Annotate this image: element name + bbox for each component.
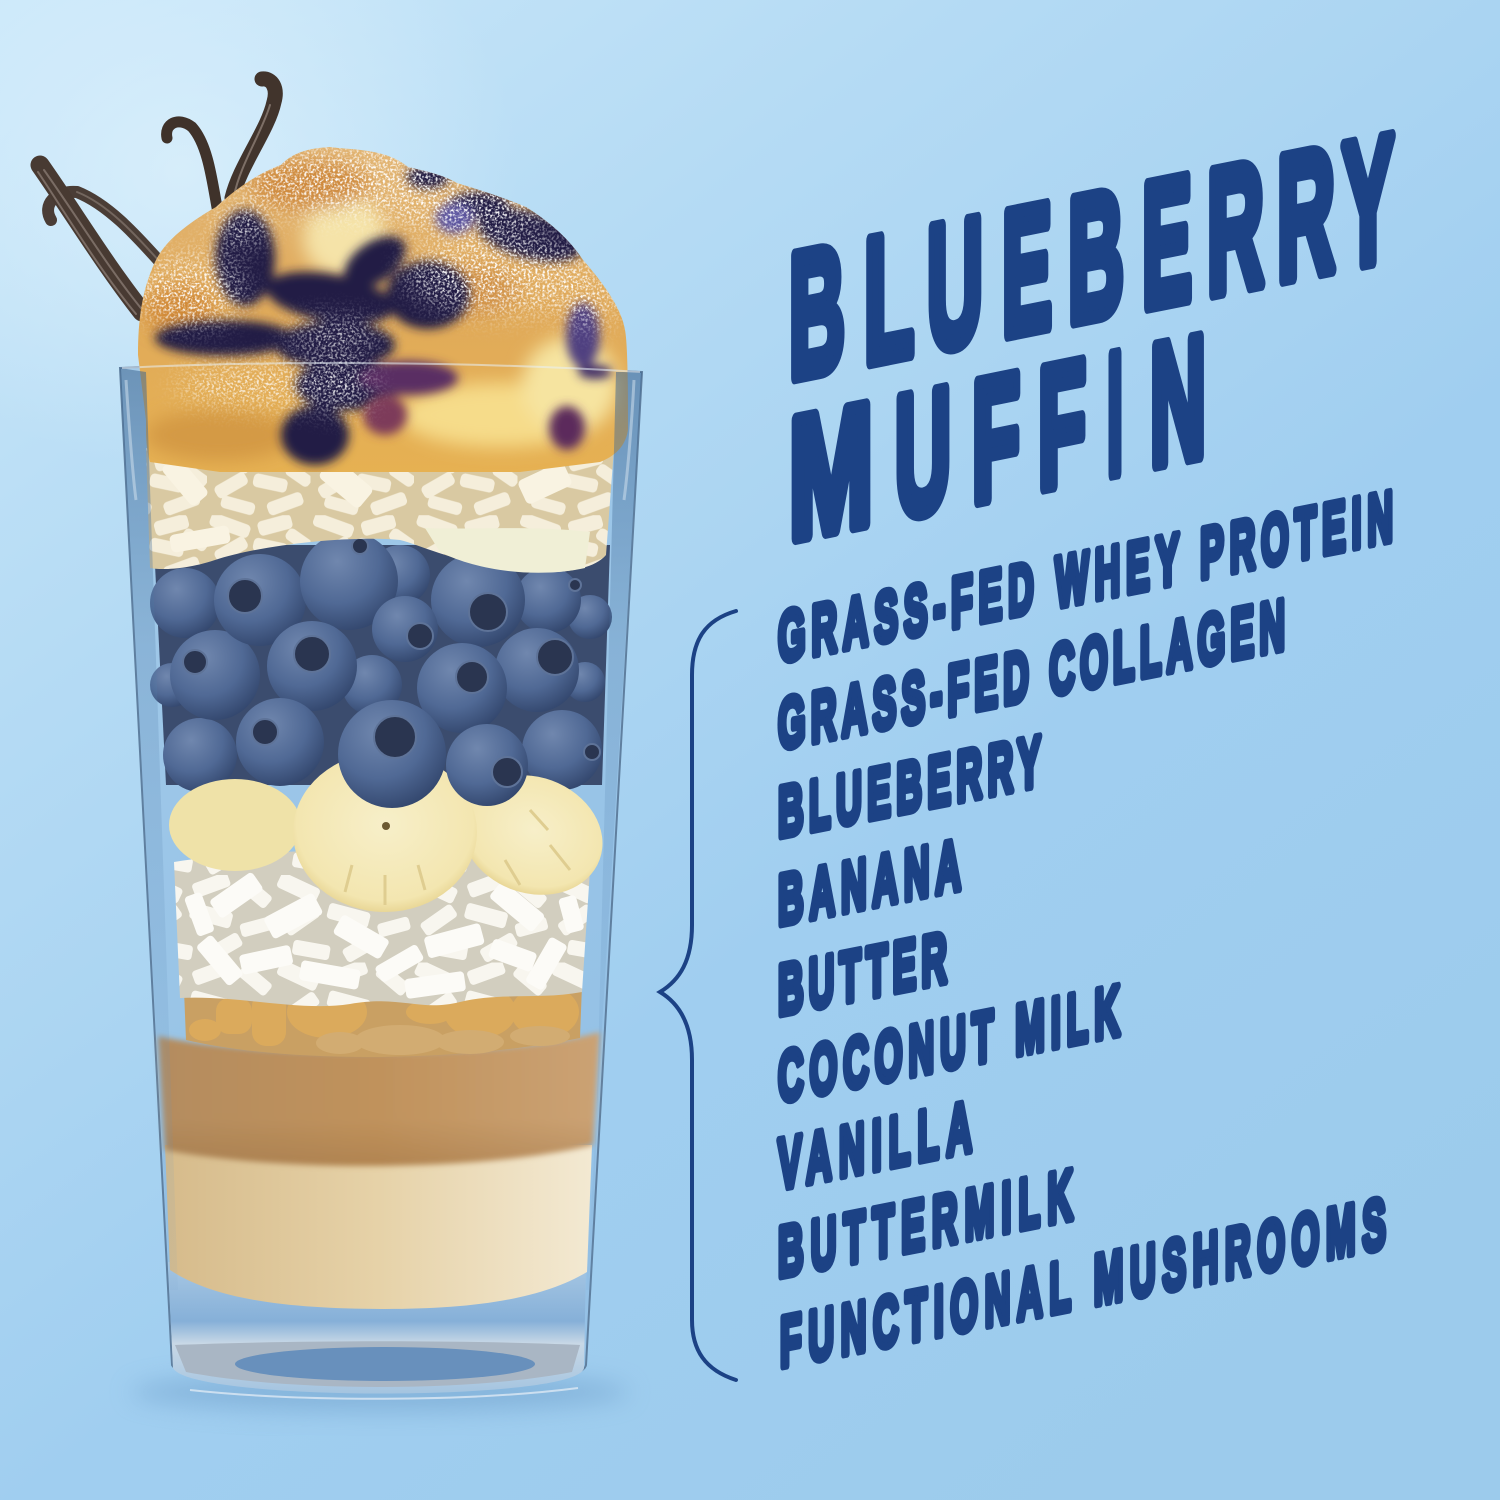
ingredient list: GRASS-FED COLLAGEN — [778, 584, 1285, 764]
back berries — [150, 532, 612, 792]
text: Y — [1342, 97, 1394, 306]
title: U — [927, 179, 983, 388]
layer: nuts — [184, 978, 582, 1057]
title: R — [1277, 109, 1335, 319]
ingredient list: BUTTER — [778, 917, 947, 1030]
title: B — [1068, 151, 1124, 360]
ingredient list: FUNCTIONAL MUSHROOMS — [780, 1183, 1386, 1382]
layer: almond flakes — [146, 448, 614, 573]
title: F — [972, 337, 1020, 539]
bracket — [660, 611, 736, 1380]
title: B — [789, 207, 845, 416]
layer: banana slices — [169, 700, 619, 914]
layer: coconut flakes — [174, 850, 590, 1006]
title: I — [1107, 316, 1123, 511]
ingredient list: BLUEBERRY — [778, 721, 1041, 852]
title: L — [864, 193, 914, 401]
ingredient list: COCONUT MILK — [778, 970, 1120, 1117]
title: N — [1150, 299, 1206, 503]
ingredient list: GRASS-FED WHEY PROTEIN — [778, 476, 1393, 677]
glass body — [120, 363, 642, 1391]
layer: blueberry muffin — [130, 140, 640, 480]
berry calyxes — [183, 538, 600, 760]
layer: blueberries — [150, 532, 612, 792]
title: F — [1038, 324, 1086, 525]
glass base — [168, 1262, 586, 1399]
ingredient list: BANANA — [778, 825, 961, 940]
title: E — [1142, 137, 1192, 345]
title: R — [1207, 123, 1264, 333]
layer: cream — [165, 1145, 592, 1309]
title: E — [1002, 165, 1052, 373]
title: U — [895, 351, 951, 554]
title: M — [789, 367, 873, 576]
ingredient list: BUTTERMILK — [778, 1154, 1073, 1292]
ingredient list: VANILLA — [778, 1086, 972, 1204]
icon: vanilla pods — [38, 79, 275, 314]
glass shadow — [130, 1372, 630, 1412]
glass walls and highlights — [120, 363, 642, 1290]
title — [789, 97, 1394, 576]
layer: peanut butter — [158, 1032, 600, 1166]
ingredient list — [778, 476, 1393, 1382]
